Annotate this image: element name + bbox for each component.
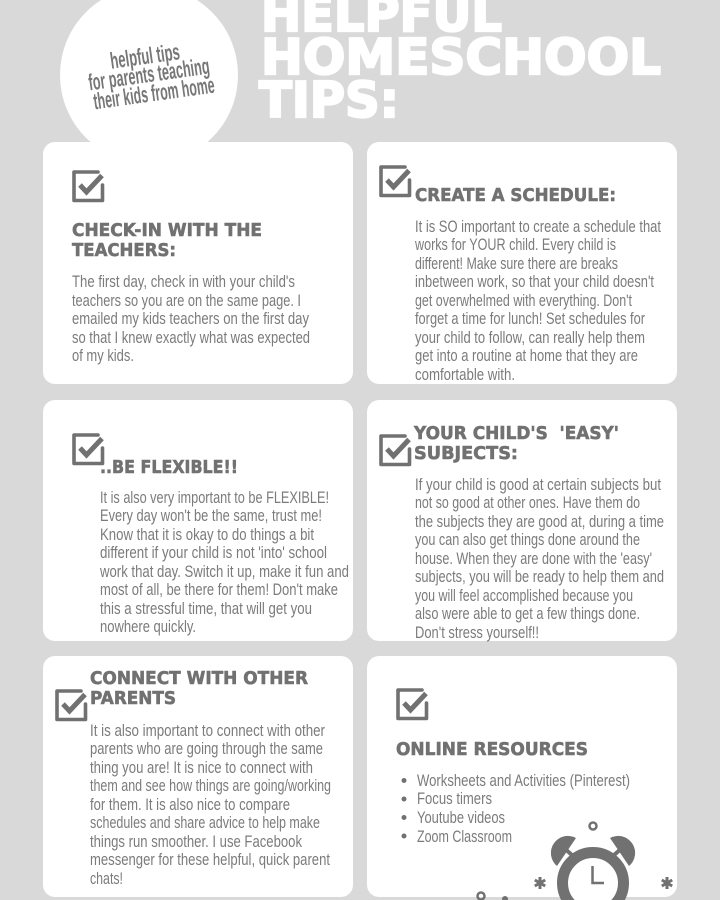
body text: parents who are going through the same [90,739,323,758]
heading: YOUR CHILD'S 'EASY' [413,424,619,444]
icon: checkbox [74,435,102,464]
body text: thing you are! It is nice to connect with [90,758,313,777]
body text: you can also get things done around the [415,530,640,549]
body text: different! Make sure there are breaks [415,254,618,273]
resource list: Worksheets and Activities (Pinterest) [417,771,630,790]
body text: It is also very important to be FLEXIBLE! [100,488,329,507]
body text: It is also important to connect with other [90,721,325,740]
resource list: Focus timers [417,789,492,808]
body text: chats! [90,869,123,888]
body text: also were able to get a few things done. [415,604,640,623]
body text: of my kids. [72,346,134,365]
body text: you will feel accomplished because you [415,586,633,605]
body text: Every day won't be the same, trust me! [100,506,322,525]
body text: them and see how things are going/working [90,776,331,795]
body text: messenger for these helpful, quick parent [90,850,330,869]
heading [72,221,262,261]
resource list: Youtube videos [417,808,505,827]
body text [414,217,661,384]
title [259,0,661,129]
icon: alarm clock [478,822,672,900]
icon: checkbox [381,436,410,464]
heading: ONLINE RESOURCES [396,740,588,760]
badge circle: for parents teaching [87,53,211,95]
heading [413,424,619,464]
panel: connect with other parents [43,656,353,897]
body text: emailed my kids teachers on the first day [72,309,309,328]
body text: The first day, check in with your child's [72,272,295,291]
body text: schedules and share advice to help make [90,813,320,832]
body text: so that I knew exactly what was expected [72,328,310,347]
heading: CHECK-IN WITH THE [72,221,262,241]
resource list: Zoom Classroom [417,827,512,846]
heading: PARENTS [90,689,176,709]
panel: check-in with the teachers [43,142,353,384]
heading [90,669,309,709]
body text: nowhere quickly. [100,617,196,636]
body text: works for YOUR child. Every child is [414,235,616,254]
heading: SUBJECTS: [414,444,518,464]
panel: create a schedule [367,142,677,384]
icon: checkbox [398,690,426,718]
heading: CREATE A SCHEDULE: [415,186,616,206]
body text: get into a routine at home that they are [415,346,638,365]
badge circle [60,0,238,164]
body text: work that day. Switch it up, make it fun and [99,562,349,581]
heading: TEACHERS: [72,241,176,261]
body text: Don't stress yourself!! [415,623,539,642]
panel: your child's easy subjects [367,400,677,642]
badge circle: their kids from home [92,72,216,114]
body text: most of all, be there for them! Don't make [100,580,338,599]
title: TIPS: [259,72,399,129]
icon: checkbox [74,172,102,200]
body text [99,488,349,636]
body text [72,272,310,365]
body text: things run smoother. I use Facebook [90,832,302,851]
body text: Know that it is okay to do things a bit [100,525,314,544]
body text [415,475,664,642]
heading: ..BE FLEXIBLE!! [100,458,238,478]
title: HOMESCHOOL [261,29,661,86]
icon: checkbox [57,691,86,720]
body text: get overwhelmed with everything. Don't [415,291,632,310]
badge circle: helpful tips [108,38,181,74]
body text: not so good at other ones. Have them do [415,493,640,512]
panel: online resources [367,656,677,897]
body text: forget a time for lunch! Set schedules for [415,309,645,328]
body text: this a stressful time, that will get you [100,599,312,618]
body text: your child to follow, can really help them [415,328,645,347]
panel: be flexible [43,400,353,641]
icon: checkbox [381,167,410,196]
heading: CONNECT WITH OTHER [90,669,309,689]
body text: teachers so you are on the same page. I [72,291,301,310]
body text: comfortable with. [415,365,515,384]
resource list [402,771,630,846]
body text: for them. It is also nice to compare [90,795,290,814]
body text [90,721,331,888]
body text: different if your child is not 'into' school [100,543,327,562]
